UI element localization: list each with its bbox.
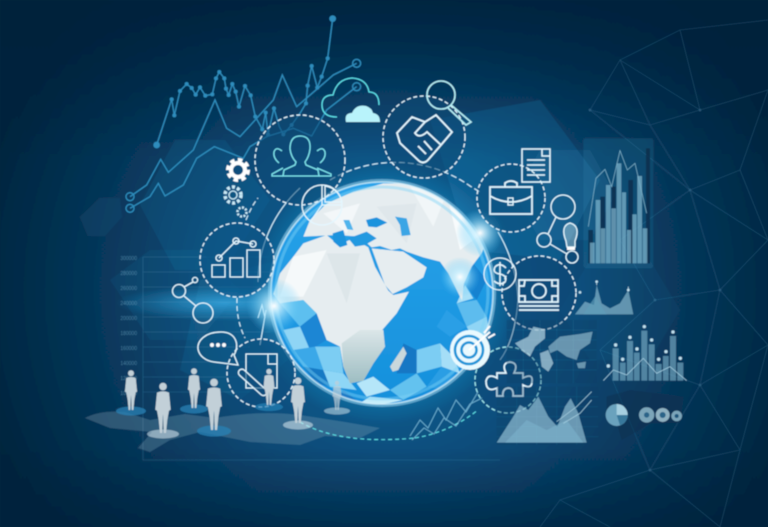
icon: magnifier <box>427 81 471 125</box>
icon: bulb and nodes right <box>537 195 578 263</box>
land: southern Africa <box>342 330 385 383</box>
lens flares <box>246 209 504 334</box>
land: Africa <box>273 235 409 383</box>
chart: mountain area with grid <box>497 387 598 445</box>
chart: world map panel <box>507 320 597 383</box>
land facets <box>324 204 359 232</box>
background hexagons <box>80 100 680 400</box>
chart: small line chart under globe <box>410 392 482 440</box>
network mesh right <box>540 20 768 527</box>
icon: target <box>450 326 495 370</box>
halo behind globe <box>250 161 514 425</box>
marker discs <box>116 403 350 438</box>
icon: people circle <box>255 115 345 205</box>
icon: money circle <box>502 256 576 330</box>
globe <box>268 179 496 407</box>
icon: cloud <box>322 78 380 122</box>
orbit rings <box>237 162 518 440</box>
axis numbers: 100000 <box>120 391 137 397</box>
land: Arabia <box>372 248 427 294</box>
seas <box>366 217 387 227</box>
axis numbers: 120000 <box>120 376 137 382</box>
axis numbers: 140000 <box>120 361 137 367</box>
land: Eurasia <box>303 183 490 301</box>
icon: handshake circle <box>383 96 465 178</box>
icon: dollar <box>484 258 516 290</box>
people standing on map <box>116 368 350 438</box>
chart: peaked bars <box>603 325 687 381</box>
icon: bar chart circle <box>200 223 274 297</box>
axis numbers: 260000 <box>120 286 137 292</box>
axis numbers: 180000 <box>120 331 137 337</box>
axis numbers <box>120 256 137 397</box>
icon: clipboard circle <box>227 339 295 407</box>
figures <box>125 368 341 433</box>
dashed circles and icons <box>172 78 578 413</box>
axis numbers: 200000 <box>120 316 137 322</box>
axis numbers: 280000 <box>120 271 137 277</box>
icon: gears <box>225 161 247 216</box>
axis numbers: 240000 <box>120 301 137 307</box>
icon: document <box>522 149 550 182</box>
axis grid left <box>143 257 500 460</box>
chart: mountain area <box>575 280 633 314</box>
world map floor <box>85 412 380 452</box>
icon: briefcase circle <box>477 164 545 232</box>
chart: tall bar chart <box>583 138 653 268</box>
icon: puzzle circle <box>475 347 541 413</box>
line charts top left <box>126 15 361 212</box>
icon: network nodes left <box>172 277 213 323</box>
axis numbers: 160000 <box>120 346 137 352</box>
glow band left of globe <box>115 285 335 321</box>
axis numbers: 300000 <box>120 256 137 262</box>
icon: pie chart <box>302 185 342 225</box>
right side charts <box>497 138 687 445</box>
ocean facets <box>280 263 490 405</box>
chart: pies and dark map <box>606 390 683 440</box>
icon: speech bubble <box>198 332 238 365</box>
